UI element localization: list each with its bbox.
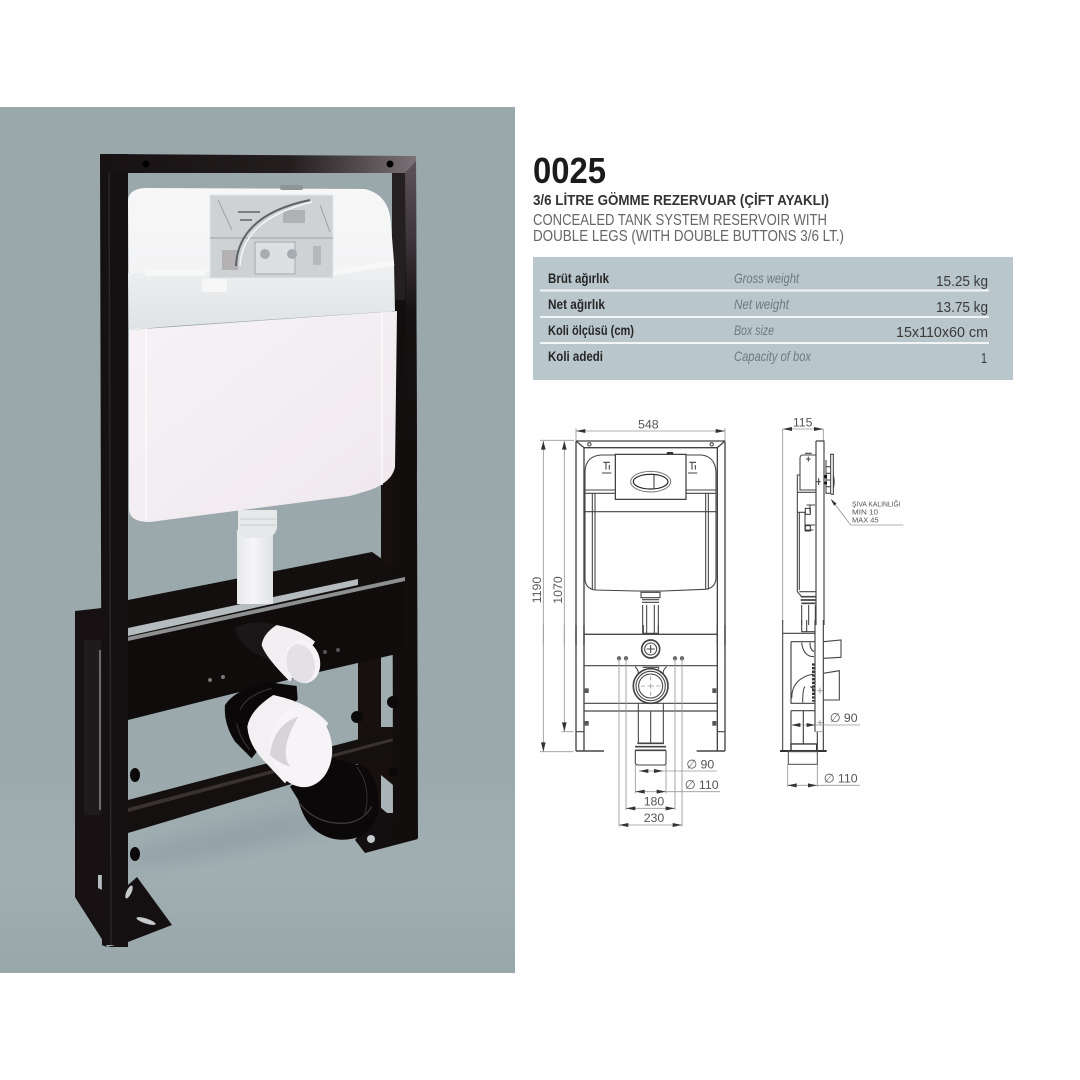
rear crossbar [128,552,405,668]
Turkish labels: Koli ölçüsü (cm) [548,323,634,338]
large white pipe [247,695,337,791]
elbow pipes [792,643,815,703]
dimension text 1190 and 1070: 1070 [551,576,565,604]
product code heading: 0025 [533,150,606,191]
dimension lines 1190 and 1070 [540,625,573,752]
tank insulation front panel [129,311,397,522]
left leg extension [75,608,107,947]
pipe dimensions: ∅ 110 [685,778,719,792]
pipe dimensions: 230 [644,811,664,825]
top cap [280,185,303,190]
wall thickness callout: MIN 10 [852,510,878,517]
pipe dimensions: ∅ 90 [686,758,714,772]
technical drawing: front view [530,417,725,827]
wall thickness callout: ŞIVA KALINLIĞI [852,500,901,509]
cistern outline [585,455,716,591]
values [896,274,988,367]
white pipe sockets [823,640,841,700]
front crossbar plate [128,580,405,720]
drain pipe [237,510,277,604]
waste pipe below bracket [638,703,663,743]
right vertical post [392,156,418,845]
dimension text 1190 and 1070: 1190 [530,577,544,603]
dimension 115: 115 [793,415,813,429]
product photo: mounting frame with tank [75,154,418,947]
English labels [734,270,812,364]
black elbow below large pipe [290,757,379,840]
flush mechanism window [210,195,333,278]
drain pipe [641,592,660,633]
English labels: Box size [734,322,774,338]
pipe dimensions [787,711,860,787]
Turkish labels: Koli adedi [548,349,603,364]
English product description: CONCEALED TANK SYSTEM RESERVOIR WITH [533,212,827,229]
dimension text 1190 and 1070 [530,440,574,645]
tank upper body [128,188,394,330]
black stub behind small pipe [235,622,287,668]
values: 15x110x60 cm [896,325,988,341]
values: 15.25 kg [936,274,988,290]
cistern profile [797,455,816,597]
rear right leg [358,465,393,840]
top bar [100,154,416,173]
dimension 115 [783,415,823,625]
values: 1 [981,351,987,367]
small white pipe [262,625,325,687]
technical drawing: side view [780,415,903,787]
pipes assembly [225,622,337,791]
right foot plate [355,807,418,853]
wall thickness callout [831,499,903,525]
pipe dimensions: ∅ 90 [830,711,858,725]
lower crossbar [128,727,405,833]
Turkish product title: 3/6 LİTRE GÖMME REZERVUAR (ÇİFT AYAKLI) [533,192,829,209]
English labels: Net weight [734,296,790,312]
English labels: Capacity of box [734,348,812,364]
left foot plate [75,877,172,947]
lower wall connection [642,640,660,658]
bolts [130,696,399,861]
flush plate with dual buttons [615,452,686,499]
specification table [533,257,1013,380]
lower frame [576,657,725,751]
black collar [225,682,298,758]
wall thickness callout: MAX 45 [852,518,879,525]
floor shadow [115,801,355,875]
waste pipe circle [633,667,668,703]
flush button profile [824,454,835,494]
upper frame [576,441,725,645]
frame and bracket profile [783,620,815,751]
pipe dimensions [619,658,720,827]
dimension 548 [576,417,725,441]
Turkish labels: Brüt ağırlık [548,271,609,286]
Turkish labels [548,271,634,364]
wall plate [816,441,824,625]
pipe dimensions: 180 [644,794,664,808]
wall plate [815,620,823,751]
dimension 548: 548 [638,417,659,431]
Turkish labels: Net ağırlık [548,297,605,312]
English product description [533,212,844,245]
pipe dimensions: ∅ 110 [824,771,858,785]
values: 13.75 kg [936,300,988,316]
tank translucent band [128,263,395,329]
English labels: Gross weight [734,270,800,286]
English product description: DOUBLE LEGS (WITH DOUBLE BUTTONS 3/6 LT.) [533,228,844,245]
left vertical post [100,154,128,945]
photo panel [0,107,515,973]
